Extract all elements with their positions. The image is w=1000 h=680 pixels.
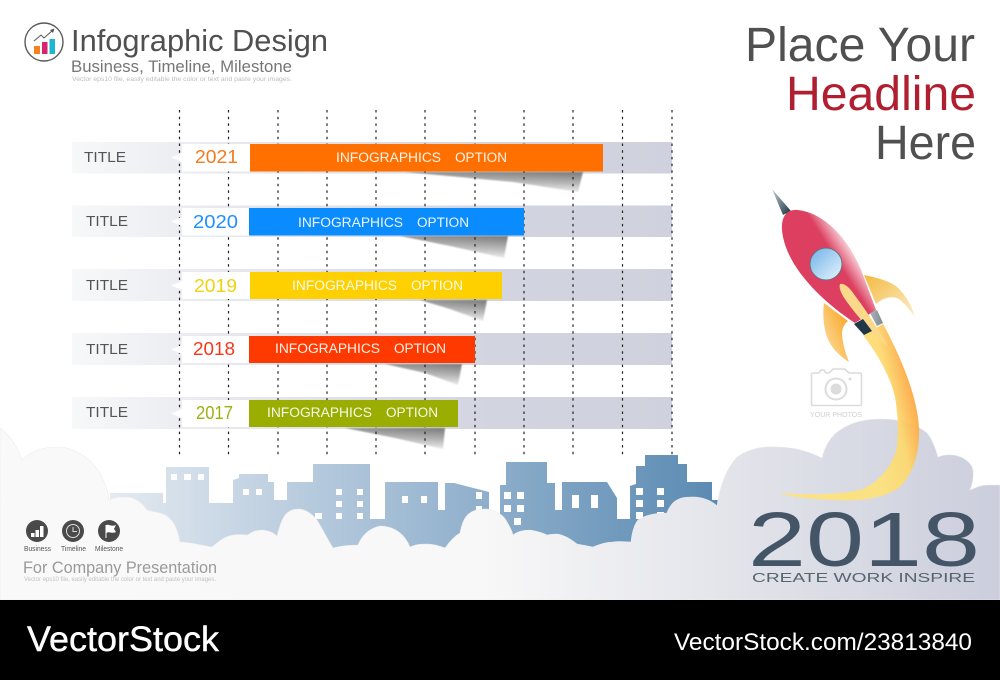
rocket right fin bbox=[864, 275, 915, 317]
rocket left fin bbox=[823, 303, 849, 362]
row 2019 bbox=[86, 272, 502, 299]
photo placeholder bbox=[810, 369, 862, 419]
row 2019: 2019 bbox=[194, 276, 237, 296]
city skyline bbox=[110, 455, 720, 560]
building windows bbox=[171, 474, 664, 525]
row 2018: 2018 bbox=[193, 339, 235, 359]
year block bbox=[748, 497, 980, 585]
icon: business bbox=[26, 520, 48, 542]
icon: timeline bbox=[62, 520, 84, 542]
row 2019: TITLE bbox=[86, 277, 128, 294]
row 2020: OPTION bbox=[417, 215, 469, 230]
row 2017: 2017 bbox=[196, 403, 233, 423]
header: infographic design bbox=[25, 23, 328, 83]
cloud bank bbox=[0, 419, 1000, 600]
brand name: VectorStock bbox=[27, 620, 220, 659]
row 2021 bbox=[84, 144, 603, 172]
bar drop shadows bbox=[345, 172, 583, 449]
row 2018: TITLE bbox=[86, 341, 128, 358]
photo caption: YOUR PHOTOS bbox=[810, 412, 862, 419]
big year: 2018 bbox=[748, 497, 980, 583]
row 2021: OPTION bbox=[455, 150, 507, 165]
row 2019: INFOGRAPHICS bbox=[292, 278, 397, 293]
rocket dark nozzle bbox=[854, 319, 872, 335]
fine print: Vector eps10 file, easily editable the color or text and paste your images. bbox=[72, 76, 292, 83]
row 2018: OPTION bbox=[394, 341, 446, 356]
row 2019: OPTION bbox=[411, 278, 463, 293]
row 2017: OPTION bbox=[386, 405, 438, 420]
icon labels bbox=[24, 546, 123, 553]
row 2020: INFOGRAPHICS bbox=[298, 215, 403, 230]
rocket nose spike bbox=[772, 189, 791, 215]
icon: milestone flag bbox=[98, 520, 120, 542]
rocket window bbox=[810, 248, 842, 280]
icon labels: Timeline bbox=[61, 546, 86, 553]
headline line 3: Here bbox=[875, 117, 976, 170]
row 2017 bbox=[86, 400, 458, 427]
subheading: Business, Timeline, Milestone bbox=[71, 58, 292, 76]
watermark bar bbox=[0, 600, 1000, 680]
row 2021: INFOGRAPHICS bbox=[336, 150, 441, 165]
icon: camera bbox=[812, 369, 862, 406]
icon labels: Milestone bbox=[95, 546, 123, 553]
rocket body bbox=[782, 210, 876, 323]
row 2018 bbox=[86, 336, 475, 363]
headline line 2: Headline bbox=[786, 68, 976, 121]
panel: timeline chart bbox=[72, 110, 672, 457]
row 2018: INFOGRAPHICS bbox=[275, 341, 380, 356]
rocket bbox=[772, 189, 919, 500]
row 2017: INFOGRAPHICS bbox=[267, 405, 372, 420]
footer block: company presentation bbox=[23, 520, 217, 583]
tagline: CREATE WORK INSPIRE bbox=[752, 570, 975, 585]
icon: growth chart badge bbox=[25, 23, 63, 61]
row 2020: 2020 bbox=[193, 212, 238, 232]
row 2020 bbox=[86, 208, 524, 236]
row 2020: TITLE bbox=[86, 213, 128, 230]
icon labels: Business bbox=[24, 546, 51, 553]
headline line 1: Place Your bbox=[745, 19, 975, 72]
rocket flame bbox=[778, 324, 919, 500]
image url: VectorStock.com/23813840 bbox=[674, 629, 972, 656]
row 2017: TITLE bbox=[86, 404, 128, 421]
company fine print: Vector eps10 file, easily editable the color or text and paste your images. bbox=[24, 576, 216, 583]
row background bands bbox=[72, 142, 672, 429]
row 2021: 2021 bbox=[195, 147, 238, 167]
row 2021: TITLE bbox=[84, 149, 126, 166]
company presentation heading: For Company Presentation bbox=[23, 558, 217, 577]
headline bbox=[745, 19, 976, 170]
rocket grey nozzle bbox=[870, 310, 883, 326]
rocket centre fin bbox=[840, 284, 888, 347]
heading: infographic design: Infographic Design bbox=[71, 23, 328, 58]
